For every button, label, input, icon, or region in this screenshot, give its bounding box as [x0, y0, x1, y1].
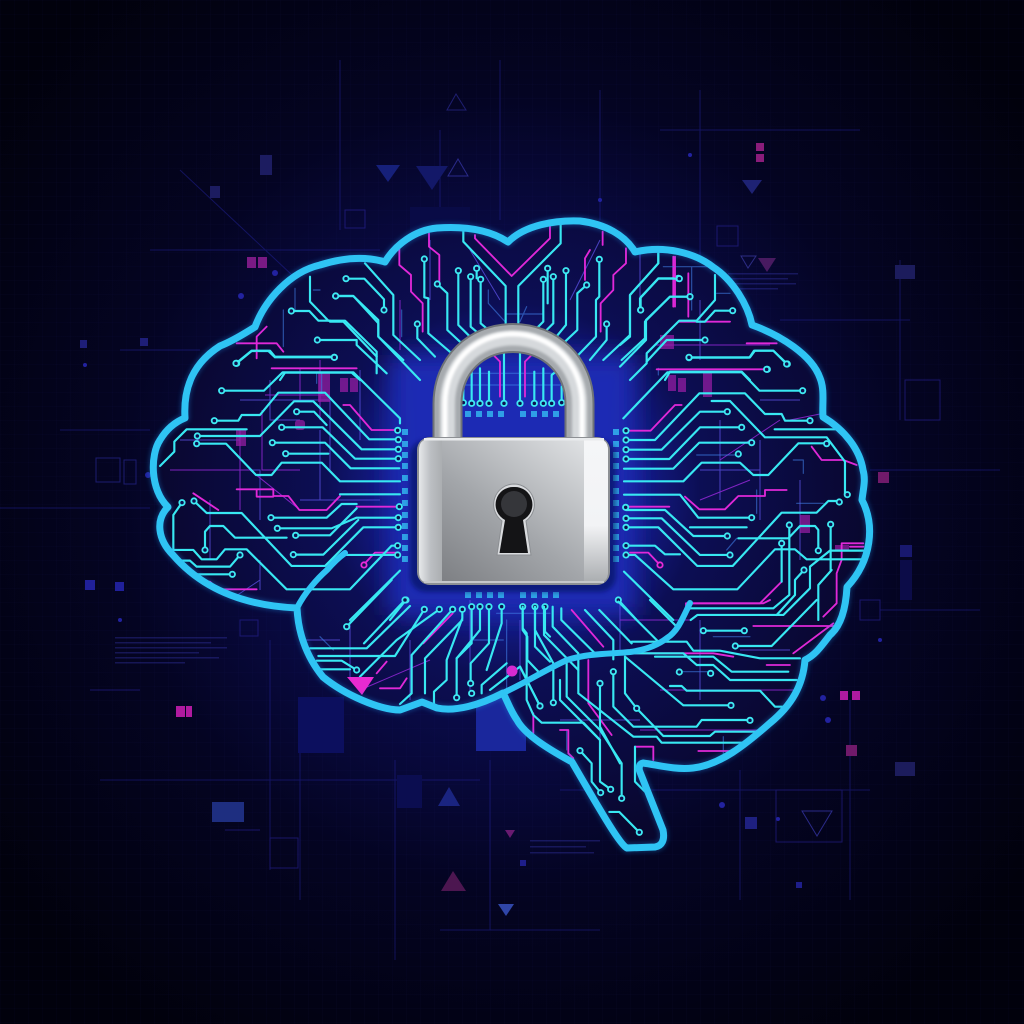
background dots — [83, 153, 882, 821]
brain interior fill — [168, 238, 854, 840]
magenta blob node — [506, 666, 518, 676]
keyhole — [494, 484, 534, 555]
traces: inside shackle — [462, 353, 564, 407]
traces: left hemisphere — [160, 351, 409, 620]
padlock — [410, 334, 616, 592]
frontal lobe fold — [297, 553, 345, 608]
filled squares — [80, 143, 915, 888]
faint inner circuitry — [170, 240, 820, 739]
triangles — [376, 94, 832, 916]
text-like data blocks — [115, 273, 798, 854]
traces: upper right — [620, 253, 789, 380]
lock shadow glow — [410, 440, 616, 592]
shackle — [445, 334, 582, 442]
traces: upper left — [233, 277, 420, 380]
magenta triangle marker — [347, 677, 374, 695]
traces: top of brain — [330, 225, 693, 360]
traces: right hemisphere — [616, 351, 863, 620]
temporal lobe divider — [503, 603, 690, 693]
magenta clusters — [236, 335, 849, 550]
lock body — [417, 437, 610, 585]
brain outline — [153, 221, 870, 848]
chip pads around lock — [402, 411, 619, 598]
outline stroke — [153, 221, 870, 848]
traces: lower middle — [310, 580, 550, 709]
circuit traces — [160, 225, 863, 835]
traces: lower right — [520, 600, 840, 835]
outline glow — [153, 221, 870, 848]
pads: bottom row — [465, 592, 559, 598]
pads: left column — [402, 429, 408, 562]
pads: right column — [613, 429, 619, 562]
pads: top row — [465, 411, 559, 417]
